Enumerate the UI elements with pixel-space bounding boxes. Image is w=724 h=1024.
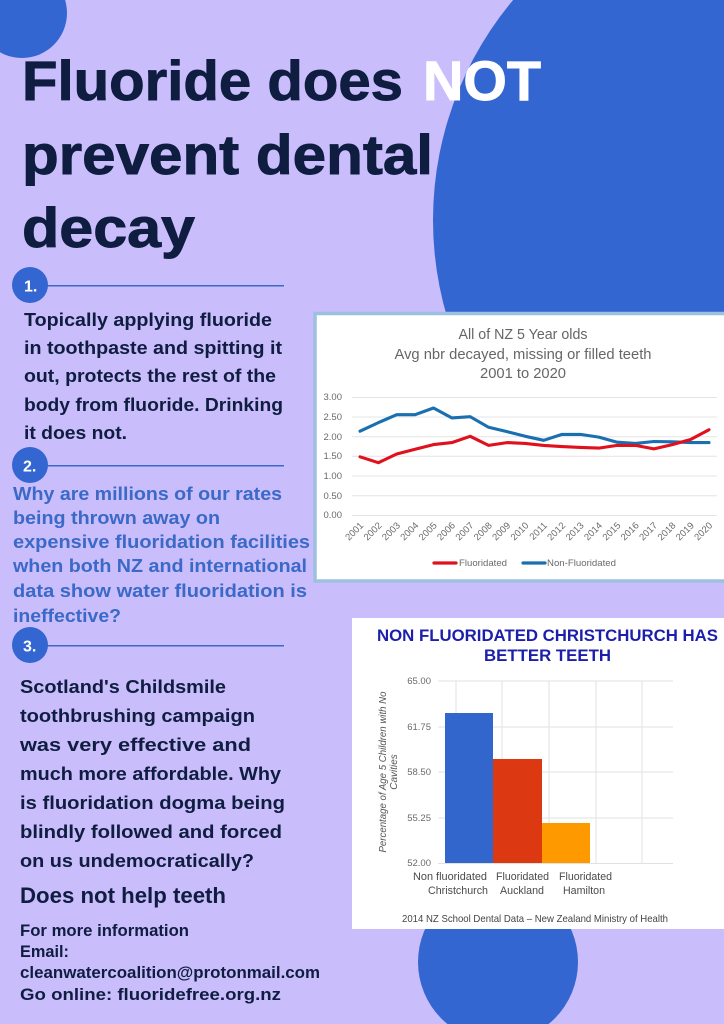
bar chart category labels: Fluoridated <box>559 871 612 883</box>
large blue circle top right <box>433 0 724 562</box>
title <box>22 49 541 259</box>
line chart x axis labels: 2003 <box>380 520 403 543</box>
section 2 text: when both NZ and international <box>12 556 307 576</box>
section 3 text: blindly followed and forced <box>20 821 282 842</box>
section 3 text: on us undemocratically? <box>20 850 254 871</box>
section 2 text: data show water fluoridation is <box>13 581 307 601</box>
line chart x axis labels: 2007 <box>454 520 476 543</box>
line chart x axis labels <box>343 520 715 543</box>
line chart x axis labels: 2012 <box>545 520 568 543</box>
section 3 text: Scotland's Childsmile <box>20 676 226 697</box>
line chart title: All of NZ 5 Year olds <box>458 327 588 343</box>
bar chart category labels: Non fluoridated <box>413 871 487 883</box>
section 3 marker <box>12 627 284 663</box>
bar chart y axis labels <box>407 676 431 869</box>
title: prevent dental <box>22 123 433 186</box>
line chart x axis labels: 2020 <box>692 520 715 543</box>
bar chart category labels: Fluoridated <box>496 871 549 883</box>
line chart y axis labels: 3.00 <box>324 392 342 403</box>
line chart x axis labels: 2009 <box>490 520 513 543</box>
section 1 text: Topically applying fluoride <box>24 310 272 330</box>
non-fluoridated series <box>360 408 709 443</box>
line chart y axis labels: 1.00 <box>324 471 342 482</box>
section 3 text: toothbrushing campaign <box>20 705 255 726</box>
line chart x axis labels: 2001 <box>343 520 366 543</box>
bar chart category labels: Christchurch <box>428 885 488 897</box>
line chart y axis labels: 0.00 <box>324 510 342 521</box>
title: decay <box>22 196 195 259</box>
bar: Auckland <box>493 759 542 863</box>
line chart x axis labels: 2004 <box>398 520 421 543</box>
bar chart category labels: Auckland <box>500 885 544 897</box>
fluoridated series <box>360 430 709 463</box>
blue circle bottom <box>418 882 578 1024</box>
section 1 text: out, protects the rest of the <box>24 366 276 386</box>
section 3 text <box>19 676 285 871</box>
line chart title: 2001 to 2020 <box>480 366 566 382</box>
line chart x axis labels: 2018 <box>656 520 678 543</box>
bar chart y axis labels: 61.75 <box>407 722 431 733</box>
line chart y axis labels <box>324 392 342 521</box>
subheading: Does not help teeth <box>20 883 226 908</box>
bar chart y axis labels: 55.25 <box>407 813 431 824</box>
line chart x axis labels: 2019 <box>674 520 697 543</box>
section 1 text: it does not. <box>24 423 127 443</box>
line chart x axis labels: 2013 <box>564 520 587 543</box>
section 2 text: expensive fluoridation facilities <box>13 532 310 552</box>
line chart x axis labels: 2002 <box>362 520 385 543</box>
bar chart y axis labels: 58.50 <box>407 767 431 778</box>
line chart x axis labels: 2011 <box>528 520 550 543</box>
section 2 text: being thrown away on <box>13 508 220 528</box>
bar chart category labels <box>413 871 612 897</box>
bar chart y axis title: Cavities <box>389 754 400 790</box>
section 3 text: much more affordable. Why <box>20 763 282 784</box>
section 2 text <box>12 484 310 626</box>
line chart legend: Fluoridated <box>459 558 507 569</box>
line chart x axis labels: 2017 <box>637 520 660 543</box>
section 3 text: was very effective and <box>19 734 251 755</box>
bar chart title: NON FLUORIDATED CHRISTCHURCH HAS <box>377 627 718 645</box>
contact information: cleanwatercoalition@protonmail.com <box>20 963 320 982</box>
section 1 text: body from fluoride. Drinking <box>24 395 283 415</box>
contact information: For more information <box>20 921 189 940</box>
small blue circle top left <box>0 0 67 58</box>
contact information <box>20 921 320 1004</box>
bar chart y axis title: Percentage of Age 5 Children with No <box>378 691 389 852</box>
bar chart title: BETTER TEETH <box>484 647 611 665</box>
line chart title: Avg nbr decayed, missing or filled teeth <box>394 347 652 363</box>
section 1 marker: 1. <box>24 278 37 296</box>
bar: Christchurch <box>445 713 493 863</box>
line chart x axis labels: 2006 <box>435 520 458 543</box>
line chart y axis labels: 2.50 <box>324 412 342 423</box>
line chart x axis labels: 2008 <box>472 520 495 543</box>
bar chart panel <box>352 618 724 929</box>
line chart y axis labels: 0.50 <box>324 491 342 502</box>
title: NOT <box>423 49 541 112</box>
section 1 text <box>24 310 283 443</box>
line chart x axis labels: 2016 <box>619 520 642 543</box>
bar chart y axis title <box>378 691 400 852</box>
bar chart y axis labels: 52.00 <box>407 858 431 869</box>
line chart x axis labels: 2015 <box>601 520 623 543</box>
line chart x axis labels: 2010 <box>509 520 531 543</box>
line chart x axis labels: 2005 <box>417 520 440 543</box>
line chart legend <box>434 558 616 569</box>
section 1 marker <box>12 267 284 303</box>
section 2 text: ineffective? <box>13 606 121 626</box>
bar: Hamilton <box>542 823 590 863</box>
section 2 marker: 2. <box>23 458 36 476</box>
contact information: Email: <box>20 942 69 961</box>
bar chart source note: 2014 NZ School Dental Data – New Zealand Ministry of Health <box>402 913 668 925</box>
section 3 marker: 3. <box>23 638 36 656</box>
section 2 text: Why are millions of our rates <box>13 484 282 504</box>
line chart panel <box>315 314 724 581</box>
line chart title <box>394 327 652 382</box>
contact information: Go online: fluoridefree.org.nz <box>20 985 281 1004</box>
line chart legend: Non-Fluoridated <box>547 558 616 569</box>
bar chart title <box>377 627 718 665</box>
line chart y axis labels: 1.50 <box>324 451 342 462</box>
section 1 text: in toothpaste and spitting it <box>24 338 282 358</box>
bar chart y axis labels: 65.00 <box>407 676 431 687</box>
section 3 text: is fluoridation dogma being <box>20 792 285 813</box>
line chart x axis labels: 2014 <box>582 520 605 543</box>
section 2 marker <box>12 447 284 483</box>
bar chart category labels: Hamilton <box>563 885 605 897</box>
line chart y axis labels: 2.00 <box>324 432 342 443</box>
title: Fluoride does <box>22 49 403 112</box>
